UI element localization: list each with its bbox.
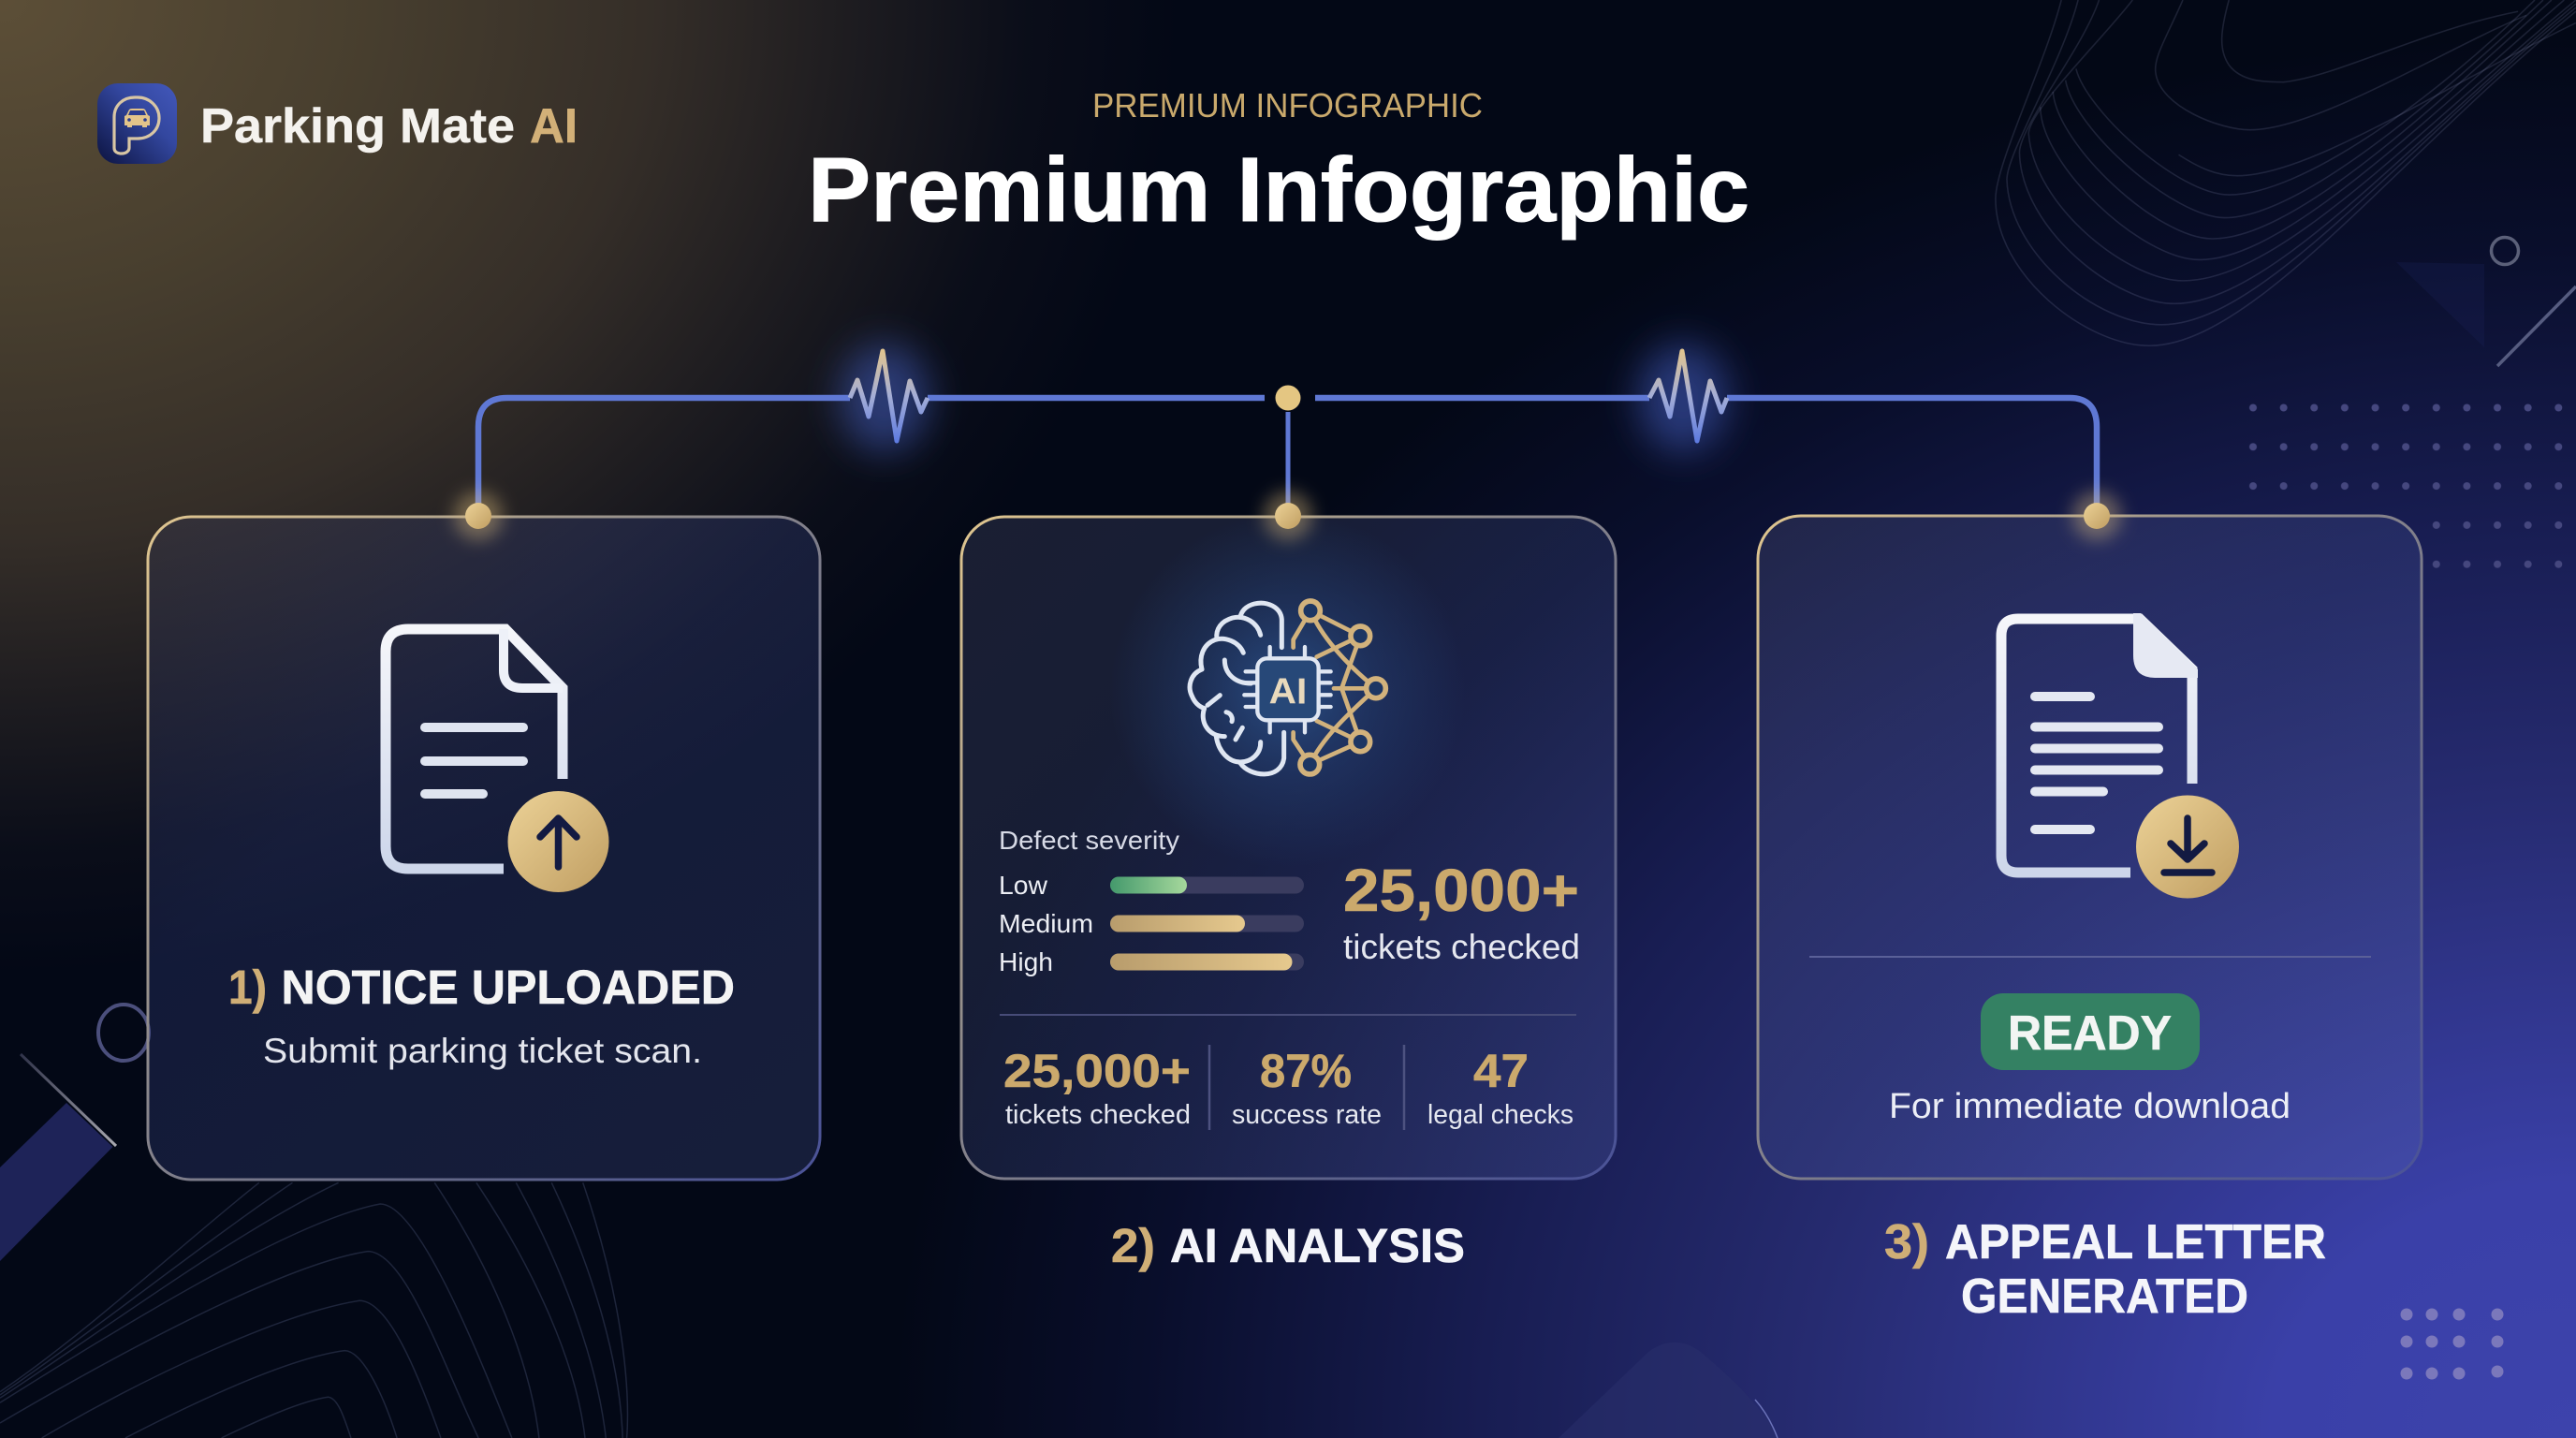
description: Submit parking ticket scan. — [263, 1032, 702, 1070]
key stat: 25,000+ — [1343, 857, 1579, 924]
defect severity chart — [999, 826, 1304, 976]
bar: medium — [999, 909, 1304, 938]
heading: step 2: 2) — [1111, 1219, 1155, 1272]
stat: legal checks: 47 — [1473, 1045, 1529, 1097]
connector timeline — [478, 344, 2097, 506]
logo: Parking Mate AI — [97, 83, 578, 164]
bar: low — [999, 871, 1304, 900]
icon: brain and neural network — [1190, 601, 1385, 774]
title: Premium Infographic — [808, 139, 1749, 241]
brand name: AI — [530, 99, 578, 154]
stat: success rate: success rate — [1232, 1100, 1382, 1130]
bottom right dot cluster — [2400, 1309, 2503, 1380]
heading: step 3: 3) — [1884, 1215, 1929, 1269]
stat: tickets checked: 25,000+ — [1003, 1045, 1191, 1097]
background shapes left — [0, 1005, 149, 1261]
heading: 1) — [228, 961, 267, 1014]
background contour lines bottom left — [0, 1182, 627, 1438]
heading: step 2: AI ANALYSIS — [1170, 1219, 1465, 1272]
key stat — [1343, 857, 1580, 966]
stat: legal checks — [1427, 1045, 1573, 1130]
icon: document download — [2001, 613, 2239, 899]
icon glow — [1110, 512, 1466, 868]
subtitle: PREMIUM INFOGRAPHIC — [1092, 86, 1483, 125]
bar: high: High — [999, 947, 1053, 976]
key stat: tickets checked — [1343, 928, 1580, 966]
stat: tickets checked: tickets checked — [1005, 1100, 1191, 1130]
heading: step 3: GENERATED — [1961, 1269, 2248, 1324]
badge: ready — [1981, 993, 2200, 1070]
icon: document upload — [386, 629, 608, 892]
heading: NOTICE UPLOADED — [281, 961, 735, 1014]
connector lines — [478, 398, 2097, 506]
bar: low: Low — [999, 871, 1048, 900]
stat: success rate: 87% — [1260, 1045, 1352, 1097]
background contour lines top right — [1996, 0, 2576, 345]
heading: step 3: APPEAL LETTER — [1945, 1215, 2326, 1269]
background shapes top right — [2396, 238, 2576, 366]
badge: ready: READY — [2008, 1006, 2172, 1061]
icon: right pulse — [1649, 351, 1727, 441]
dot grid right — [2238, 389, 2576, 584]
icon: brain and neural network: AI — [1269, 670, 1307, 712]
stat: legal checks: legal checks — [1427, 1100, 1573, 1130]
icon: parking P with car — [97, 83, 177, 164]
bar: medium: Medium — [999, 909, 1093, 938]
description: For immediate download — [1889, 1087, 2291, 1126]
heading: step 3 — [1884, 1215, 2326, 1324]
connector nodes on cards — [454, 492, 2121, 540]
stat: tickets checked — [1003, 1045, 1191, 1130]
panel: step 3 ready — [1758, 516, 2422, 1179]
brand name: Parking Mate — [200, 99, 515, 154]
centre node — [1275, 386, 1301, 410]
background shape bottom centre — [1559, 1343, 1778, 1438]
defect severity chart: Defect severity — [999, 826, 1179, 855]
bar: high — [999, 947, 1304, 976]
panel: step 2 AI analysis — [961, 512, 1616, 1179]
pulse glows — [840, 344, 1728, 452]
stat: success rate — [1232, 1045, 1382, 1130]
panel: step 1 notice uploaded — [148, 517, 820, 1180]
icon: left pulse — [850, 351, 928, 441]
